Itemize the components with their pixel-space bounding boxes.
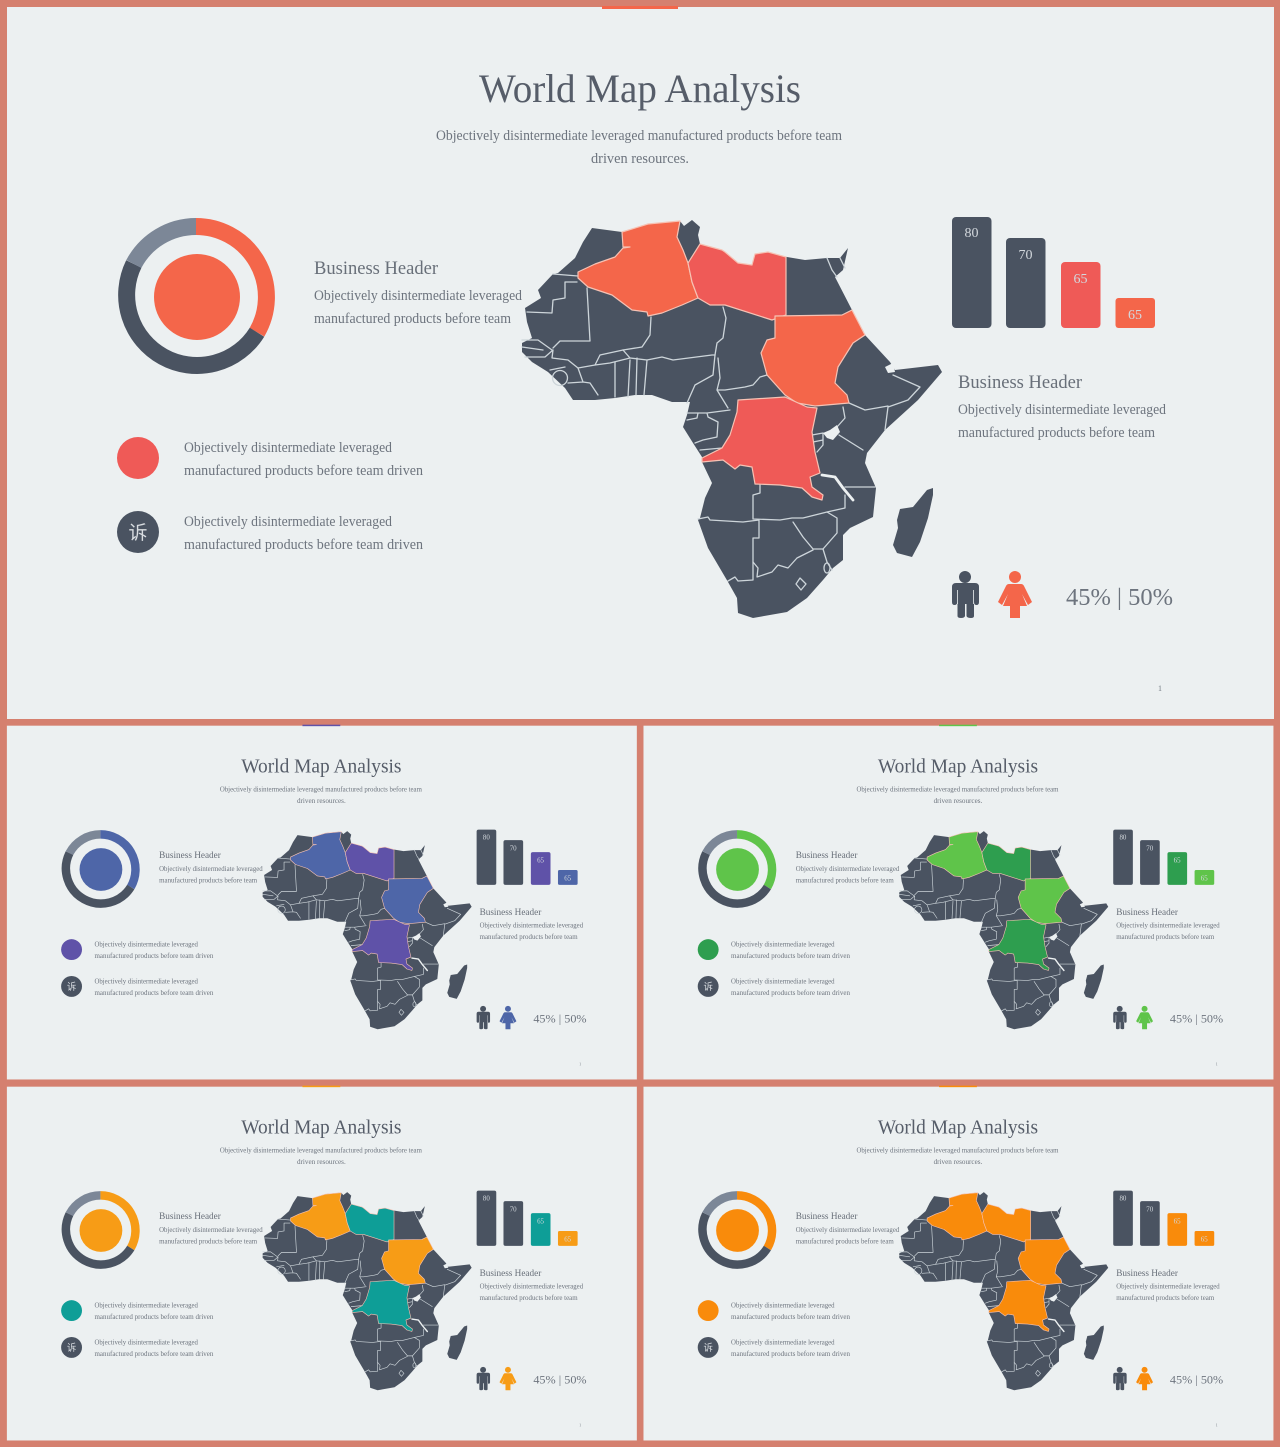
subtitle: driven resources. [591, 151, 689, 167]
bar chart: 65 [1128, 308, 1142, 323]
text block: business header right [480, 908, 583, 941]
panel: orange variant [643, 1086, 1273, 1440]
bar chart [1113, 830, 1214, 885]
subtitle: Objectively disintermediate leveraged manufactured products before team [856, 784, 1059, 793]
icon: woman [998, 571, 1032, 618]
bar chart: 65 [537, 857, 545, 865]
legend item: dark: Objectively disintermediate leveraged [94, 976, 198, 985]
text block: business header left: Objectively disintermediate leveraged [159, 1225, 263, 1234]
stat: gender percentages: 45% | 50% [1170, 1373, 1223, 1387]
text block: business header left: Business Header [796, 1212, 858, 1222]
text block: business header right: Objectively disintermediate leveraged [1116, 1282, 1220, 1291]
text block: business header right: Objectively disintermediate leveraged [958, 402, 1166, 418]
stat: gender percentages: 45% | 50% [533, 1373, 587, 1387]
legend item: dark: manufactured products before team driven [731, 988, 850, 997]
page number: 1 [579, 1423, 581, 1428]
text block: business header left [314, 258, 522, 327]
donut chart [703, 1195, 772, 1265]
legend item: accent [117, 437, 423, 479]
subtitle: Objectively disintermediate leveraged manufactured products before team [856, 1145, 1059, 1154]
icon: woman [1136, 1367, 1153, 1390]
text block: business header left: manufactured products before team [796, 875, 894, 884]
page number: 1 [1216, 1062, 1218, 1067]
subtitle [856, 784, 1059, 805]
title: World Map Analysis [878, 755, 1038, 777]
legend item: accent: Objectively disintermediate leveraged [731, 940, 835, 949]
stat: gender percentages: 45% | 50% [1170, 1012, 1223, 1026]
legend item: dark [117, 511, 423, 553]
page number: 1 [579, 1062, 581, 1067]
text block: business header right: Objectively disintermediate leveraged [1116, 921, 1220, 930]
subtitle [220, 1145, 422, 1166]
bar chart [1113, 1191, 1214, 1246]
legend item: accent: manufactured products before team driven [94, 1312, 214, 1321]
stat: gender percentages: 45% | 50% [1066, 585, 1173, 611]
text block: business header left: manufactured products before team [159, 875, 257, 884]
legend item: dark: manufactured products before team driven [731, 1349, 850, 1358]
panel: main slide [7, 6, 1274, 719]
panel: blue variant [7, 725, 637, 1079]
title: World Map Analysis [479, 66, 801, 111]
text block: business header left: Objectively disintermediate leveraged [796, 1225, 899, 1234]
legend item: dark: 诉 [128, 522, 148, 544]
legend item: dark [61, 976, 214, 997]
text block: business header left: Objectively disintermediate leveraged [314, 288, 522, 304]
legend item: dark: manufactured products before team driven [94, 988, 214, 997]
donut chart [66, 1195, 135, 1265]
map of Africa [522, 220, 942, 618]
bar chart: 70 [1018, 248, 1032, 263]
bar chart: 65 [1074, 272, 1088, 287]
text block: business header left: Business Header [159, 1212, 222, 1222]
text block: business header left: manufactured products before team [159, 1236, 257, 1245]
title: World Map Analysis [241, 1116, 402, 1138]
bar chart: 80 [964, 226, 978, 241]
legend item: dark: Objectively disintermediate leveraged [731, 976, 835, 985]
bar chart: 65 [1174, 857, 1181, 865]
bar chart: 65 [537, 1218, 545, 1226]
text block: business header right: Objectively disintermediate leveraged [480, 921, 583, 930]
bar chart: 70 [1146, 1206, 1154, 1214]
icon: man [477, 1367, 490, 1390]
legend item: accent: Objectively disintermediate leveraged [731, 1301, 835, 1310]
icon: man [1113, 1006, 1127, 1029]
text block: business header right: Objectively disintermediate leveraged [480, 1282, 583, 1291]
bar chart: 70 [510, 1206, 517, 1214]
bar chart [952, 217, 1155, 328]
legend item: accent [61, 1300, 214, 1321]
map of Africa [899, 831, 1108, 1029]
text block: business header left: Business Header [314, 258, 439, 279]
bar chart: 80 [1119, 834, 1127, 842]
panel: amber and teal variant [7, 1086, 637, 1440]
icon: woman [500, 1006, 516, 1029]
legend item: accent: Objectively disintermediate leveraged [94, 1301, 198, 1310]
bar chart: 70 [510, 845, 517, 853]
icon: woman [500, 1367, 516, 1390]
bar chart: 70 [1146, 845, 1154, 853]
legend item: accent [61, 939, 214, 960]
legend item: dark: 诉 [703, 981, 713, 993]
text block: business header left [796, 851, 899, 884]
text block: business header left: Business Header [159, 851, 222, 861]
legend item: dark [698, 1337, 850, 1358]
text block: business header right [958, 372, 1166, 441]
subtitle: driven resources. [934, 796, 982, 805]
bar chart [477, 1191, 578, 1246]
subtitle [220, 784, 422, 805]
text block: business header right: Business Header [958, 372, 1083, 393]
bar chart: 65 [1201, 1235, 1208, 1243]
page number: 1 [1158, 684, 1162, 693]
subtitle: Objectively disintermediate leveraged manufactured products before team [436, 128, 842, 144]
legend item: accent: Objectively disintermediate leveraged [94, 940, 198, 949]
bar chart: 65 [1174, 1218, 1181, 1226]
text block: business header left [159, 1212, 263, 1245]
text block: business header right: Business Header [480, 908, 542, 918]
subtitle: driven resources. [934, 1157, 982, 1166]
subtitle [436, 128, 842, 167]
text block: business header left: manufactured products before team [314, 311, 511, 327]
icon: man [1113, 1367, 1127, 1390]
icon: woman [1136, 1006, 1153, 1029]
page number: 1 [1216, 1423, 1218, 1428]
text block: business header right: manufactured products before team [1116, 932, 1214, 941]
text block: business header left [796, 1212, 899, 1245]
legend item: accent: manufactured products before team driven [731, 951, 850, 960]
legend item: dark: Objectively disintermediate leveraged [184, 514, 392, 530]
legend item: dark: Objectively disintermediate leveraged [731, 1337, 835, 1346]
legend item: accent: manufactured products before team driven [184, 463, 423, 479]
bar chart: 80 [1119, 1195, 1127, 1203]
bar chart: 80 [483, 834, 490, 842]
title: World Map Analysis [241, 755, 402, 777]
subtitle: driven resources. [297, 1157, 346, 1166]
stat: gender percentages: 45% | 50% [533, 1012, 587, 1026]
legend item: accent: Objectively disintermediate leveraged [184, 440, 392, 456]
map of Africa [263, 831, 472, 1029]
legend item: dark: 诉 [67, 1342, 76, 1354]
text block: business header right: Business Header [1116, 908, 1179, 918]
legend item: dark: Objectively disintermediate leveraged [94, 1337, 198, 1346]
text block: business header left: Objectively disintermediate leveraged [159, 864, 263, 873]
text block: business header right: Business Header [480, 1269, 542, 1279]
legend item: dark: manufactured products before team driven [94, 1349, 214, 1358]
legend item: dark [61, 1337, 214, 1358]
text block: business header right [480, 1269, 583, 1302]
legend item: dark: 诉 [67, 981, 76, 993]
donut chart [66, 834, 135, 904]
legend item: dark [698, 976, 850, 997]
text block: business header left: manufactured products before team [796, 1236, 894, 1245]
bar chart: 65 [564, 1235, 572, 1243]
legend item: accent [698, 1300, 850, 1321]
panel: green variant [643, 725, 1273, 1079]
icon: man [952, 571, 979, 618]
text block: business header right: manufactured products before team [958, 425, 1155, 441]
text block: business header right: manufactured products before team [480, 932, 578, 941]
bar chart: 65 [564, 874, 572, 882]
subtitle: Objectively disintermediate leveraged manufactured products before team [220, 1145, 422, 1154]
bar chart: 65 [1201, 874, 1208, 882]
text block: business header right [1116, 908, 1220, 941]
text block: business header right: manufactured products before team [480, 1293, 578, 1302]
text block: business header left: Business Header [796, 851, 858, 861]
legend item: accent: manufactured products before team driven [94, 951, 214, 960]
bar chart: 80 [483, 1195, 490, 1203]
text block: business header right [1116, 1269, 1220, 1302]
subtitle: Objectively disintermediate leveraged manufactured products before team [220, 784, 422, 793]
subtitle [856, 1145, 1059, 1166]
legend item: dark: 诉 [703, 1342, 713, 1354]
legend item: accent: manufactured products before team driven [731, 1312, 850, 1321]
map of Africa [263, 1192, 472, 1390]
title: World Map Analysis [878, 1116, 1038, 1138]
icon: man [477, 1006, 490, 1029]
text block: business header right: Business Header [1116, 1269, 1179, 1279]
bar chart [477, 830, 578, 885]
legend item: accent [698, 939, 850, 960]
text block: business header left: Objectively disintermediate leveraged [796, 864, 899, 873]
text block: business header right: manufactured products before team [1116, 1293, 1214, 1302]
donut chart [703, 834, 772, 904]
donut chart [127, 226, 266, 365]
text block: business header left [159, 851, 263, 884]
subtitle: driven resources. [297, 796, 346, 805]
map of Africa [899, 1192, 1108, 1390]
legend item: dark: manufactured products before team driven [184, 537, 423, 553]
